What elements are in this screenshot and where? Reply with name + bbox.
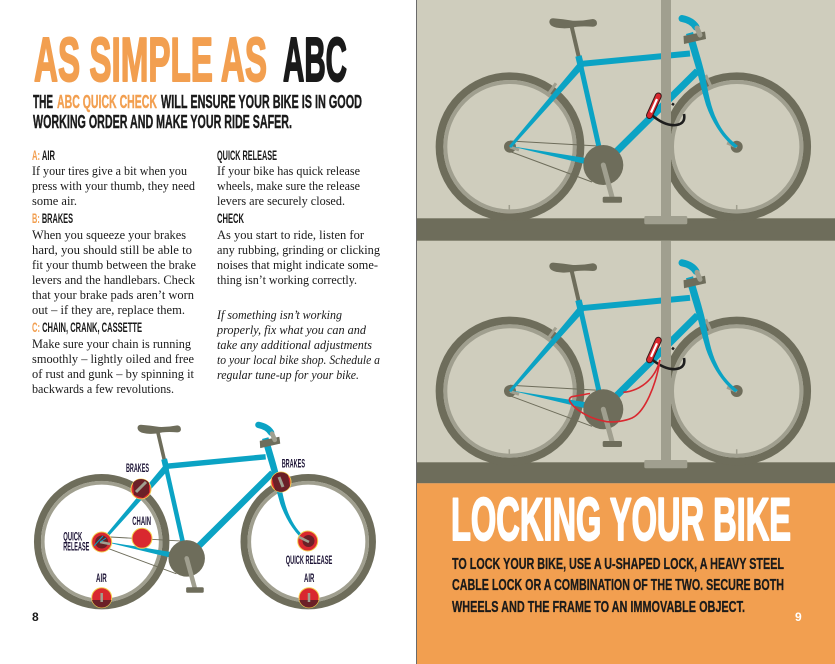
bike diagram: QUICK RELEASE — [286, 555, 332, 567]
text block: quick release, check, note — [216, 148, 381, 382]
check point: rear quick release: RELEASE — [63, 542, 89, 554]
text block: air, brakes, chain: Make sure your chain is running — [32, 337, 192, 351]
check point: chain: CHAIN — [132, 516, 151, 528]
text block: air, brakes, chain: A: AIR — [32, 148, 55, 163]
text block: air, brakes, chain: of rust and gunk – by spinning it — [32, 367, 195, 381]
check point: rear quick release: QUICK — [63, 532, 83, 544]
text block: air, brakes, chain: C: CHAIN, CRANK, CASSETTE — [32, 320, 142, 335]
text block: air, brakes, chain: press with your thumb, they need — [32, 179, 196, 193]
text: ABC — [283, 26, 347, 95]
post — [644, 241, 687, 468]
valves — [509, 204, 737, 210]
valves — [509, 449, 737, 454]
bike diagram — [37, 425, 372, 608]
page divider — [416, 0, 417, 664]
text block: quick release, check, note: any rubbing, grinding or clicking — [217, 243, 381, 257]
text block: air, brakes, chain: backwards a few revolutions. — [32, 382, 174, 396]
check point: rear brakes: BRAKES — [126, 463, 149, 475]
text block: air, brakes, chain: smoothly – lightly oiled and free — [32, 352, 194, 366]
text block: quick release, check, note: thing isn’t working correctly. — [217, 273, 357, 287]
text block: air, brakes, chain: If your tires give a bit when you — [32, 164, 188, 178]
text block: air, brakes, chain: that your brake pads aren’t worn — [32, 288, 195, 302]
subtitle: ABC QUICK CHECK — [57, 92, 157, 112]
check point: rear quick release — [63, 532, 112, 554]
text block: quick release, check, note: QUICK RELEASE — [217, 148, 277, 163]
check point: front quick release — [286, 531, 332, 567]
text block: air, brakes, chain: When you squeeze your brakes — [32, 228, 186, 242]
text block: quick release, check, note: CHECK — [217, 211, 244, 226]
subtitle — [33, 92, 362, 132]
text block: air, brakes, chain: hard, you should still be able to — [32, 243, 192, 257]
orange panel — [417, 483, 835, 664]
subtitle: THE — [33, 92, 53, 112]
text block: air, brakes, chain: B: BRAKES — [32, 211, 73, 226]
text block: quick release, check, note: properly, fix what you can and — [216, 323, 367, 337]
text block: air, brakes, chain: some air. — [32, 194, 77, 208]
check point: front air valve: AIR — [304, 573, 315, 585]
text block: quick release, check, note: wheels, make sure the release — [217, 179, 360, 193]
text block: quick release, check, note: If something isn’t working — [216, 308, 342, 322]
bike illustration — [37, 425, 372, 606]
text block: air, brakes, chain: fit your thumb between the brake — [32, 258, 196, 272]
red cable — [569, 360, 660, 422]
right page background — [416, 0, 835, 664]
post — [644, 0, 687, 224]
top scene: bike locked with U-lock — [417, 0, 835, 241]
subtitle: WORKING ORDER AND MAKE YOUR RIDE SAFER. — [33, 112, 292, 132]
check point: rear air valve — [92, 573, 112, 608]
title: AS SIMPLE AS — [34, 26, 267, 95]
text block: air, brakes, chain — [32, 148, 196, 396]
left page background — [0, 0, 416, 664]
bike — [440, 263, 807, 462]
check point: front air valve — [299, 573, 319, 608]
check point: rear air valve: AIR — [96, 573, 107, 585]
text block: air, brakes, chain: levers and the handlebars. Check — [32, 273, 196, 287]
bike — [440, 18, 807, 217]
text block: quick release, check, note: noises that might indicate some- — [217, 258, 378, 272]
text block: quick release, check, note: As you start to ride, listen for — [217, 228, 365, 242]
text block: quick release, check, note: levers are securely closed. — [217, 194, 345, 208]
text block: quick release, check, note: regular tune-up for your bike. — [217, 368, 359, 382]
text block: quick release, check, note: to your local bike shop. Schedule a — [217, 353, 380, 367]
page number 8: 8 — [32, 610, 39, 624]
check point: chain — [132, 516, 152, 548]
body text — [452, 556, 784, 616]
text block: air, brakes, chain: out – if they are, replace them. — [32, 303, 185, 317]
check point: rear brakes — [126, 463, 151, 499]
U-lock — [650, 340, 684, 369]
U-lock — [650, 96, 684, 125]
page number 9: 9 — [795, 610, 802, 624]
check point: front brakes — [271, 458, 305, 492]
bottom scene: bike locked with U-lock and cable — [417, 241, 835, 483]
text block: quick release, check, note: If your bike has quick release — [217, 164, 360, 178]
text block: quick release, check, note: take any additional adjustments — [217, 338, 372, 352]
subtitle: WILL ENSURE YOUR BIKE IS IN GOOD — [161, 92, 362, 112]
bike diagram: BRAKES — [282, 458, 305, 470]
